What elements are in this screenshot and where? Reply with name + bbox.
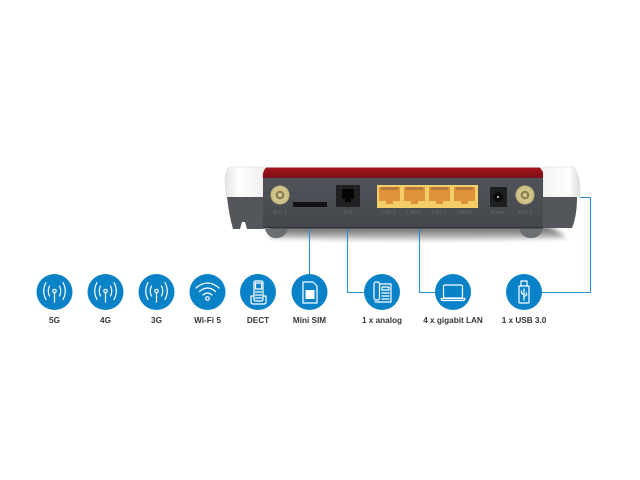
feature: Mini SIM: [292, 274, 328, 325]
connector line: Mini SIM: [308, 229, 310, 274]
feature: 5G: 5G: [49, 316, 60, 325]
icon: USB stick: [519, 281, 529, 303]
feature: Wi-Fi 5: Wi-Fi 5: [194, 316, 221, 325]
feature: USB: 1 x USB 3.0: [502, 316, 547, 325]
feature: DECT: [240, 274, 276, 325]
connector line: USB: [541, 198, 590, 292]
feature: analog: 1 x analog: [362, 316, 402, 325]
icon: laptop: [441, 285, 465, 300]
port labels: LAN 3: [432, 210, 446, 216]
LAN ports: [377, 185, 478, 208]
router: [225, 167, 580, 240]
router shadow: [270, 226, 566, 240]
feature: gigabit LAN: 4 x gigabit LAN: [423, 316, 483, 325]
connector line: analog: [348, 229, 365, 292]
icon: SIM card: [303, 282, 317, 303]
SIM slot: [293, 202, 327, 207]
feature: 3G: [138, 274, 174, 325]
feature: DECT: DECT: [247, 316, 269, 325]
rear panel: [263, 178, 543, 228]
port labels: Power: [491, 210, 505, 216]
feature: 3G: 3G: [151, 316, 162, 325]
feature: 4G: 4G: [100, 316, 111, 325]
port labels: [273, 210, 532, 216]
port labels: LAN 4: [457, 210, 471, 216]
port labels: ANT 2: [518, 210, 532, 216]
right end cap: [543, 167, 580, 228]
phone port: [336, 185, 360, 207]
icon: antenna: [95, 282, 116, 302]
port labels: LAN 1: [382, 210, 396, 216]
feet: [265, 229, 543, 238]
icon: desk phone: [374, 282, 391, 302]
port labels: Fon: [344, 210, 353, 216]
icon: cordless phone: [251, 281, 266, 304]
port labels: LAN 2: [407, 210, 421, 216]
icon: antenna: [44, 282, 65, 302]
feature: 4G: [88, 274, 124, 325]
icon: wifi: [196, 283, 219, 300]
icon: antenna: [146, 282, 167, 302]
feature: Mini SIM: Mini SIM: [293, 316, 326, 325]
power port: [490, 187, 507, 207]
feature: 5G: [36, 274, 72, 325]
port labels: ANT 1: [273, 210, 287, 216]
feature: USB: [502, 274, 547, 325]
feature: Wi-Fi 5: [190, 274, 226, 325]
connector line: LAN: [420, 229, 436, 292]
feature: gigabit LAN: [423, 274, 483, 325]
antenna connector 1: [270, 186, 290, 204]
antenna connector 2: [516, 186, 534, 204]
feature: analog: [362, 274, 402, 325]
red top band: [263, 168, 543, 178]
left end cap: [225, 167, 263, 229]
